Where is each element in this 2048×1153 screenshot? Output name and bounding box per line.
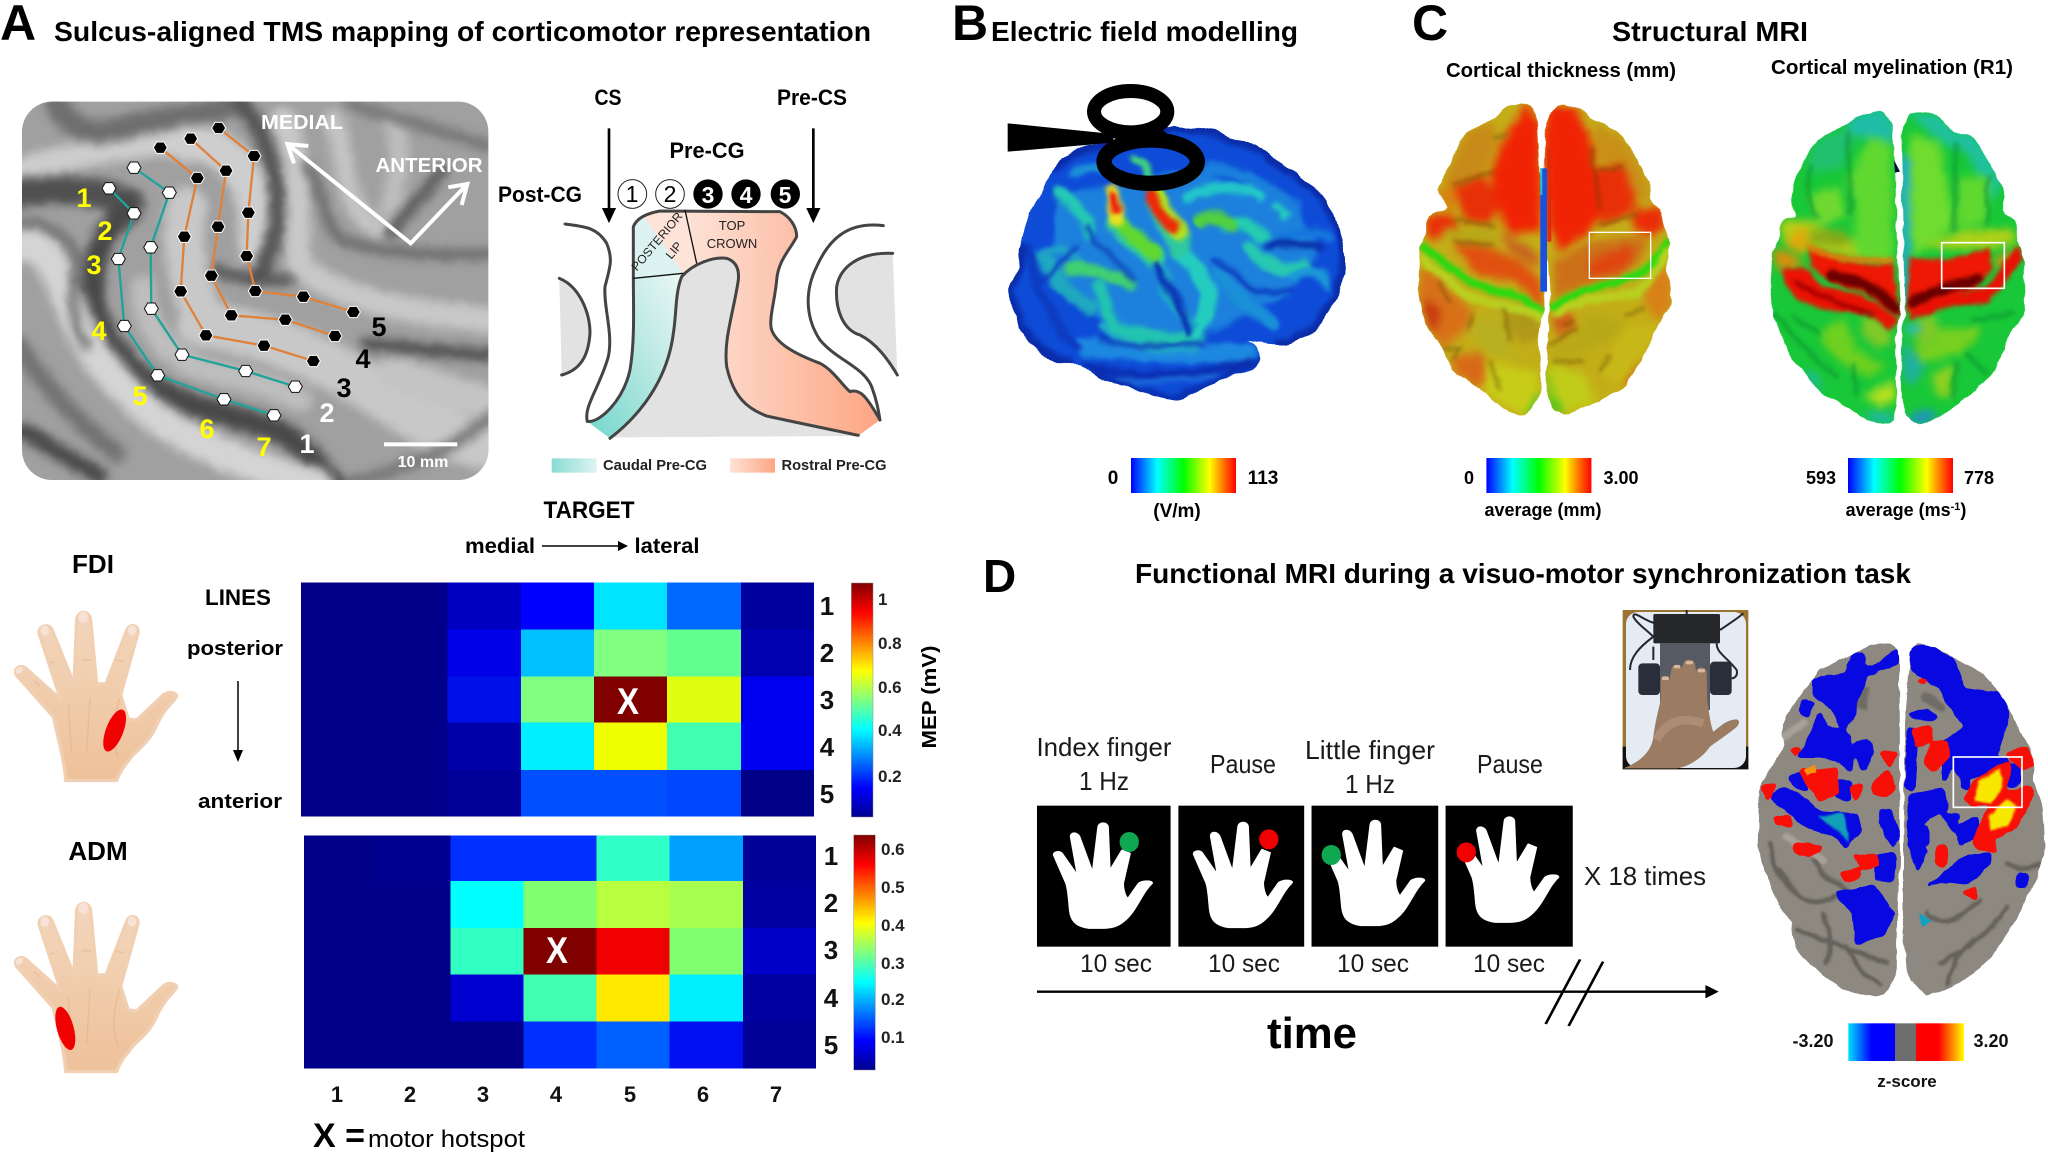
label FDI: FDI	[72, 549, 114, 579]
legend label caudal: Caudal Pre-CG	[603, 457, 707, 474]
row labels ADM: 1	[824, 841, 838, 871]
brain: fMRI activation map	[1757, 640, 2047, 1061]
colorbar labels FDI: 0.4	[878, 721, 902, 740]
row labels FDI: 2	[820, 638, 834, 668]
label posterior lip: POSTERIOR	[628, 209, 686, 274]
duration labels	[1080, 950, 1545, 978]
medial to lateral axis: lateral	[634, 535, 700, 558]
task labels: Pause	[1477, 749, 1543, 779]
heatmap: ADM	[304, 836, 816, 1068]
column labels: 1	[331, 1082, 343, 1107]
label CS: CS	[594, 85, 622, 110]
marker numbers: 1	[626, 181, 638, 207]
repeat label: X 18 times	[1584, 861, 1706, 891]
marker numbers	[626, 181, 792, 208]
colour scale: thickness	[1464, 458, 1639, 520]
medial to lateral axis	[465, 535, 700, 558]
colorbar labels ADM	[881, 840, 905, 1047]
marker numbers: 3	[702, 182, 714, 208]
line numbers: 1	[299, 429, 315, 459]
title: panel B: Electric field modelling	[991, 16, 1298, 47]
label lines: LINES	[205, 585, 271, 610]
direction label: anterior: ANTERIOR	[376, 155, 483, 177]
heading: cortical myelination: Cortical myelination (R1)	[1771, 57, 2013, 79]
row labels FDI: 3	[820, 685, 834, 715]
motor hotspot note: motor hotspot	[368, 1126, 525, 1153]
colorbar title MEP: MEP (mV)	[919, 646, 941, 748]
label anterior: anterior	[198, 791, 282, 813]
marker numbers: 2	[664, 181, 676, 207]
column labels: 7	[770, 1082, 782, 1107]
row labels FDI	[820, 591, 835, 809]
task timeline panels	[1037, 806, 1719, 1026]
task labels: Little finger	[1305, 735, 1435, 765]
icon: hand FDI	[14, 612, 177, 780]
colorbar labels ADM: 0.5	[881, 878, 905, 897]
label ADM: ADM	[68, 836, 128, 866]
line numbers: 3	[336, 373, 352, 403]
grid line 2	[134, 168, 295, 387]
target numbers: 3	[86, 250, 102, 280]
brain: cortical myelination	[1770, 110, 2026, 424]
row labels FDI: 5	[820, 779, 834, 809]
colorbar labels ADM: 0.2	[881, 990, 905, 1009]
scale bar	[384, 442, 457, 446]
column labels: 4	[550, 1082, 563, 1107]
grid line 4	[191, 139, 335, 336]
heading: cortical thickness: Cortical thickness (mm)	[1446, 60, 1676, 82]
cortex surface background	[20, 100, 490, 483]
target numbers	[76, 183, 272, 462]
label Post-CG: Post-CG	[498, 182, 582, 207]
stimulus: index finger go	[1037, 806, 1171, 947]
target numbers: 5	[132, 381, 148, 411]
colour scale labels: -3.20	[1792, 1031, 1834, 1051]
title: panel C: Structural MRI	[1612, 16, 1808, 47]
marker numbers: 5	[779, 182, 792, 208]
line numbers: 4	[355, 344, 371, 374]
posterior lip	[643, 210, 697, 273]
TMS coil	[1008, 91, 1197, 183]
scale label: 10 mm	[398, 454, 448, 471]
row labels ADM: 4	[824, 983, 839, 1013]
region of interest box	[1953, 757, 2022, 807]
legend label rostral: Rostral Pre-CG	[782, 457, 886, 474]
arrows: medial and anterior	[287, 144, 467, 243]
heatmap: FDI	[301, 583, 814, 817]
colorbar labels ADM: 0.6	[881, 840, 905, 859]
title: panel A: Sulcus-aligned TMS mapping of corticomotor representation	[54, 16, 871, 47]
medial to lateral axis: medial	[465, 535, 535, 558]
region of interest box	[1589, 232, 1651, 278]
colorbar FDI	[851, 583, 873, 817]
row labels ADM: 3	[824, 935, 838, 965]
grid line 1	[109, 188, 274, 415]
task labels: Pause	[1210, 749, 1276, 779]
grid line 3	[160, 148, 313, 361]
duration labels: 10 sec	[1208, 950, 1280, 978]
line numbers: 5	[371, 312, 387, 342]
stimulus: little finger pause	[1446, 806, 1573, 947]
target numbers: 2	[97, 216, 113, 246]
line numbers: 2	[319, 398, 335, 428]
brain: cortical thickness	[1418, 103, 1672, 416]
duration labels: 10 sec	[1337, 950, 1409, 978]
stimulation targets	[102, 122, 360, 421]
medial wall strip	[1540, 148, 1551, 292]
column labels: 5	[624, 1082, 636, 1107]
hotspot marker ADM: X	[546, 930, 568, 971]
colour scale: thickness: 0	[1464, 468, 1474, 488]
colour scale: thickness: 3.00	[1603, 468, 1639, 488]
colour scale: myelination: 593	[1806, 468, 1836, 488]
row labels ADM	[824, 841, 839, 1060]
axis label time: time	[1267, 1009, 1357, 1058]
direction label: medial: MEDIAL	[261, 112, 343, 134]
colour scale: myelination	[1806, 458, 1994, 520]
target numbers: 4	[91, 316, 107, 346]
line markers	[618, 179, 800, 209]
heading: target: TARGET	[544, 497, 635, 524]
colorbar labels FDI: 0.2	[878, 767, 902, 786]
panel: inflated cortex map with stimulation grid	[20, 100, 490, 483]
subregion dividers	[633, 210, 697, 278]
colour scale: myelination: 778	[1964, 468, 1994, 488]
grey white matter	[559, 253, 897, 437]
axis break	[1546, 959, 1603, 1026]
rostral precentral gyrus	[685, 210, 880, 435]
line numbers	[299, 312, 387, 459]
legend swatch: caudal	[552, 458, 597, 473]
label top crown	[707, 218, 757, 251]
colour scale: myelination: )	[1960, 500, 1966, 520]
colour scale: myelination: -1	[1951, 501, 1960, 513]
colour scale labels: 3.20	[1973, 1031, 2009, 1051]
panel letter D: D	[983, 550, 1016, 602]
label posterior: posterior	[187, 638, 283, 660]
column labels: 6	[697, 1082, 709, 1107]
colorbar labels FDI: 0.6	[878, 678, 902, 697]
caudal precentral gyrus	[587, 273, 683, 438]
colour scale: myelination: average (ms	[1846, 500, 1951, 520]
colour scale: electric field	[1108, 458, 1278, 522]
stimulus: little finger go	[1312, 806, 1438, 947]
colorbar labels FDI	[878, 590, 902, 786]
duration labels: 10 sec	[1080, 950, 1152, 978]
stimulus: index finger pause	[1178, 806, 1304, 947]
row labels ADM: 5	[824, 1030, 838, 1060]
label Pre-CS: Pre-CS	[777, 85, 847, 110]
label posterior lip: LIP	[663, 239, 685, 262]
target numbers: 7	[256, 432, 272, 462]
icon: hand ADM	[14, 903, 177, 1071]
colour scale labels: z-score	[1877, 1072, 1937, 1091]
arrow posterior to anterior	[233, 681, 243, 762]
target numbers: 1	[76, 183, 92, 213]
hotspot marker FDI: X	[617, 681, 639, 722]
motor hotspot note	[313, 1117, 525, 1153]
label top crown: TOP	[719, 218, 745, 233]
column labels: 2	[404, 1082, 416, 1107]
colorbar labels ADM: 0.3	[881, 954, 905, 973]
photo: hand on response device	[1623, 610, 1748, 769]
colour scale: electric field: 113	[1248, 468, 1278, 489]
colour scale: thickness: average (mm)	[1484, 500, 1602, 520]
column labels: 3	[477, 1082, 489, 1107]
colorbar labels FDI: 0.8	[878, 634, 902, 653]
duration labels: 10 sec	[1473, 950, 1545, 978]
row labels ADM: 2	[824, 888, 838, 918]
grid line 5	[219, 128, 353, 312]
region of interest box	[1942, 243, 2004, 288]
task labels: Index finger	[1036, 732, 1172, 762]
colour scale: electric field: 0	[1108, 468, 1118, 489]
label Pre-CG: Pre-CG	[670, 138, 744, 163]
task labels: 1 Hz	[1079, 766, 1129, 796]
marker numbers: 4	[740, 182, 753, 208]
colorbar labels FDI: 1	[878, 590, 887, 609]
Pre-CS arrow	[808, 128, 818, 220]
medial marker	[1894, 160, 1900, 173]
panel: gyrus schematic	[498, 85, 897, 474]
time arrow	[1037, 985, 1719, 998]
title: panel D: Functional MRI during a visuo-motor synchronization task	[1135, 558, 1911, 589]
colorbar ADM	[854, 835, 875, 1070]
colour scale: electric field: (V/m)	[1153, 501, 1201, 522]
colorbar labels ADM: 0.4	[881, 916, 905, 935]
target numbers: 6	[199, 414, 215, 444]
CS arrow	[604, 128, 614, 220]
colour scale labels	[1792, 1031, 2009, 1091]
brain: electric field model	[1003, 91, 1353, 407]
task labels	[1036, 732, 1543, 799]
label top crown: CROWN	[707, 236, 757, 251]
legend swatch: rostral	[730, 458, 775, 473]
colorbar labels ADM: 0.1	[881, 1028, 905, 1047]
colour scale bar	[1848, 1023, 1964, 1061]
gyrus outlines	[559, 211, 897, 438]
row labels FDI: 4	[820, 732, 835, 762]
column labels	[331, 1082, 782, 1107]
task labels: 1 Hz	[1345, 769, 1395, 799]
row labels FDI: 1	[820, 591, 834, 621]
